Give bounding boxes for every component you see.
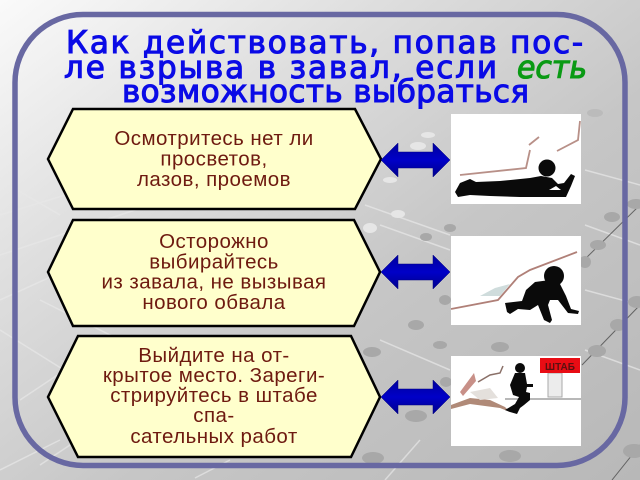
title: ле взрыва в завал, если	[64, 50, 497, 86]
step 2 text: из завала, не вызывая	[102, 270, 326, 294]
picture 1: person lying under debris	[451, 114, 581, 204]
step 1 text: просветов,	[160, 148, 268, 170]
picture 2: person crawling out	[451, 236, 581, 325]
step 2	[48, 220, 380, 326]
step 3 text: крытое место. Зареги-	[103, 364, 325, 387]
picture 3 sign: ШТАБ	[545, 362, 575, 373]
step 1 text: лазов, проемов	[137, 168, 291, 191]
step 3 text: стрируйтесь в штабе	[110, 384, 318, 407]
step 2 hexagon	[48, 220, 380, 326]
arrow 2	[381, 255, 450, 289]
step 1 hexagon	[48, 109, 381, 209]
step 2 text: Осторожно	[159, 230, 269, 253]
title: возможность выбраться	[122, 74, 529, 110]
arrow 3	[381, 380, 450, 414]
step 2 text: выбирайтесь	[149, 250, 279, 274]
step 2 text	[102, 230, 326, 314]
step 3 text: Выйдите на от-	[138, 344, 290, 367]
step 3 text	[103, 344, 325, 448]
step 2 text: нового обвала	[142, 291, 286, 314]
title	[64, 25, 587, 110]
step 3 text: спа-	[193, 404, 235, 427]
step 1	[48, 109, 381, 209]
step 1 text	[114, 127, 314, 191]
step 1 text: Осмотритесь нет ли	[114, 127, 314, 150]
arrow 1	[381, 143, 450, 177]
title: Как действовать, попав пос-	[66, 25, 583, 61]
highlighted word: есть	[517, 50, 587, 86]
step 3 hexagon	[48, 336, 380, 457]
step 3 text: сательных работ	[130, 425, 298, 448]
step 3	[48, 336, 380, 457]
picture 3: person running to headquarters	[451, 356, 581, 446]
